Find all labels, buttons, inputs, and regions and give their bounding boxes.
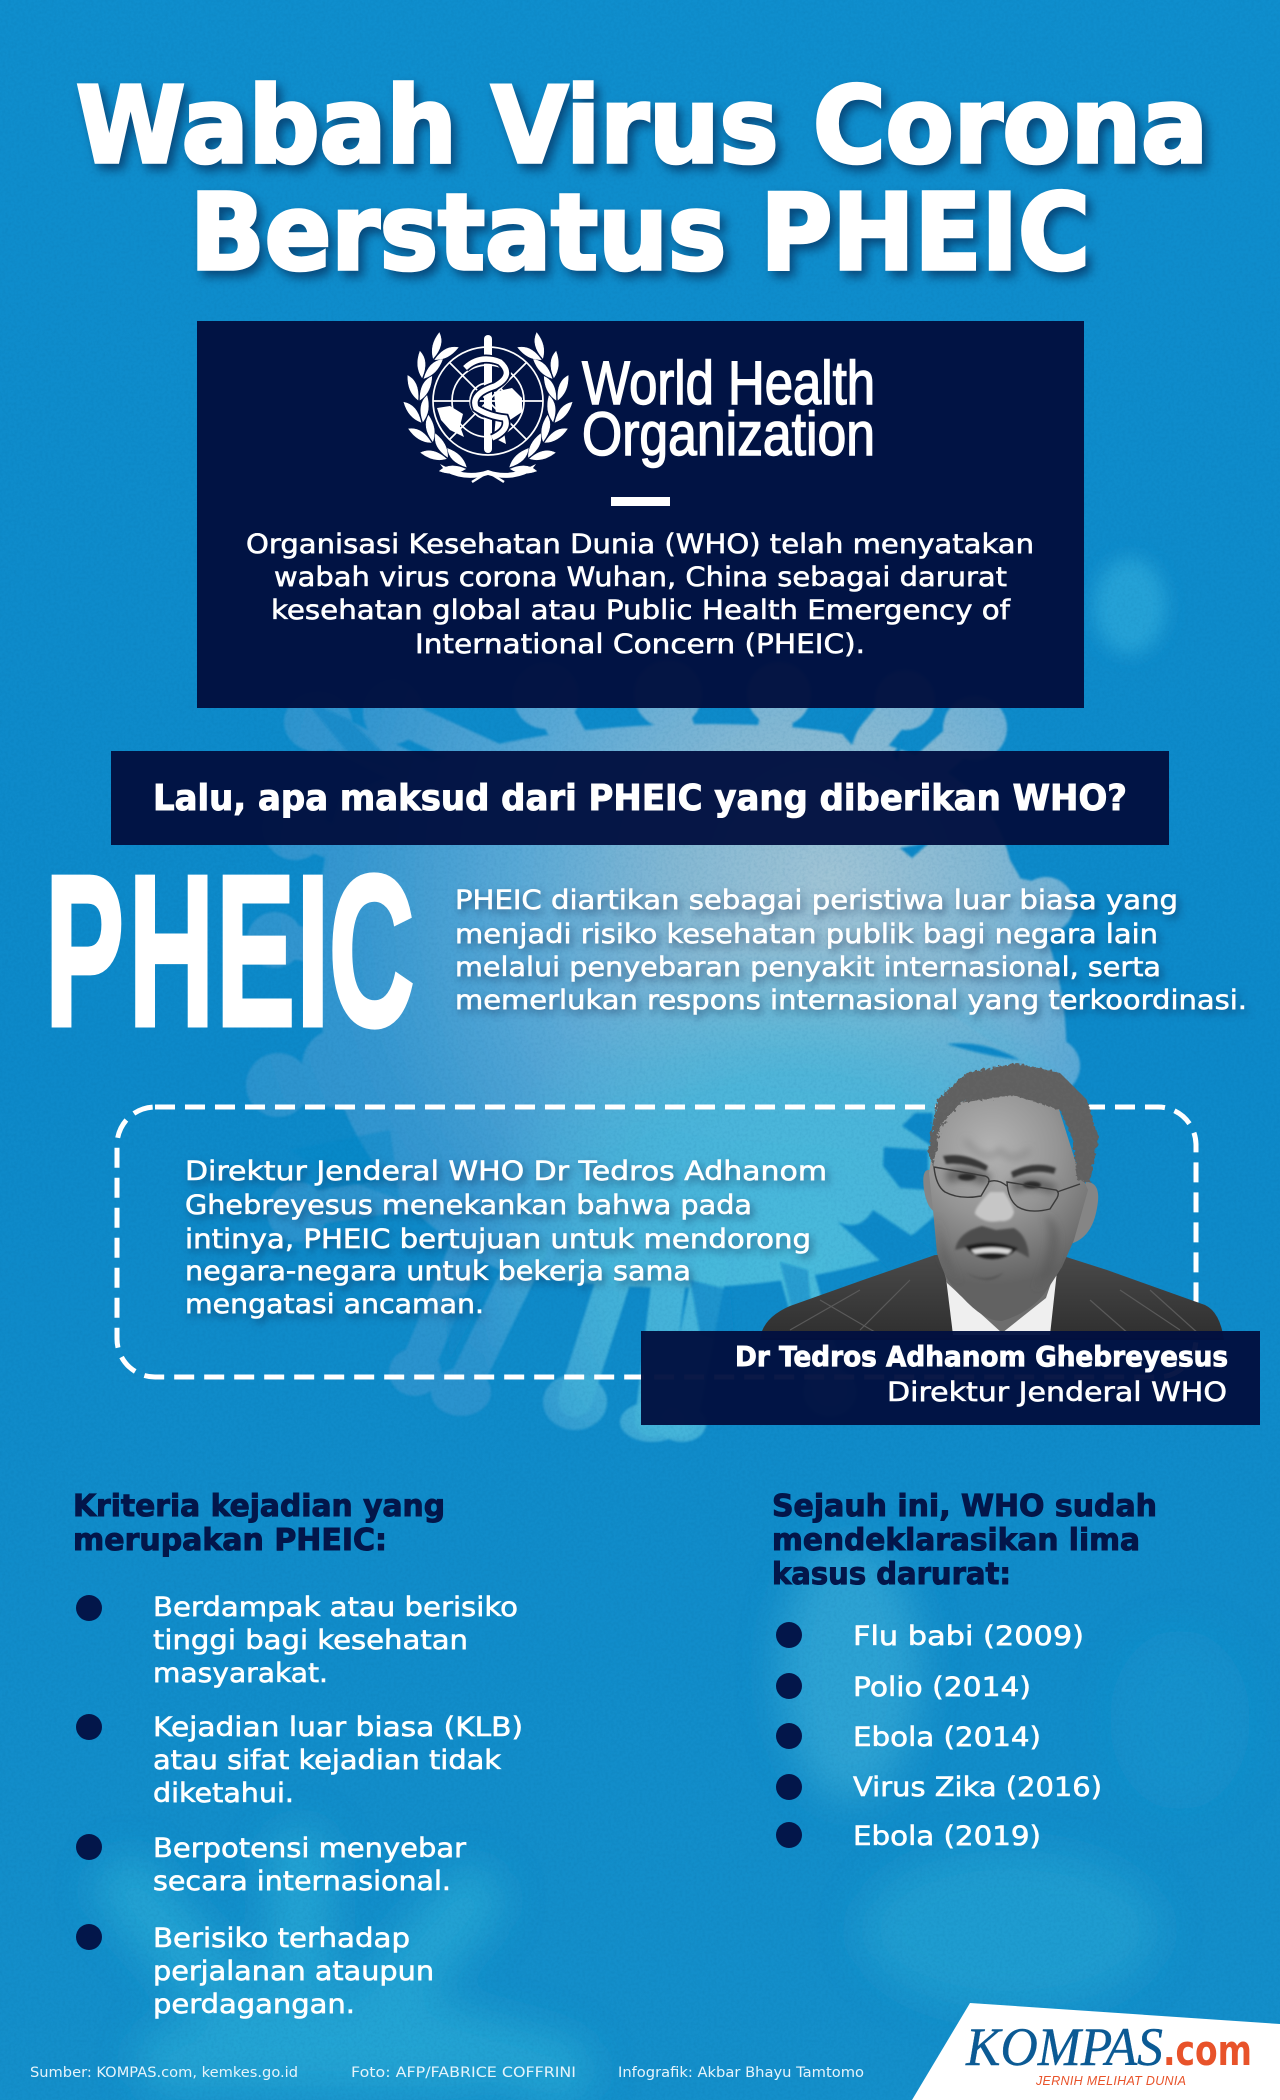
list: emergencies: Ebola (2014) xyxy=(853,1722,1041,1753)
list: criteria: Berisiko terhadap xyxy=(153,1923,410,1954)
list: criteria: secara internasional. xyxy=(153,1866,451,1897)
list: criteria: Berpotensi menyebar xyxy=(153,1833,467,1864)
big word: PHEIC: PHEIC xyxy=(45,830,414,1071)
text: WHO statement: Organisasi Kesehatan Dunia (WHO) telah menyatakan xyxy=(246,529,1034,560)
heading: criteria: Kriteria kejadian yang xyxy=(73,1489,445,1524)
title: Berstatus PHEIC xyxy=(190,172,1090,294)
title: Wabah Virus Corona xyxy=(76,65,1208,187)
text: WHO statement xyxy=(246,529,1034,660)
logo: KOMPAS.com xyxy=(912,2003,1280,2100)
heading: emergencies: mendeklarasikan lima xyxy=(772,1523,1140,1558)
text: World Health Organization: Organization xyxy=(582,400,875,468)
icon: WHO emblem xyxy=(404,333,572,482)
text: Tedros quote: negara-negara untuk bekerja sama xyxy=(185,1256,691,1287)
text: PHEIC definition: PHEIC diartikan sebagai peristiwa luar biasa yang xyxy=(455,885,1178,916)
list: emergencies xyxy=(853,1621,1102,1852)
background: blurred light spot, top right xyxy=(1094,558,1166,654)
text: Tedros quote xyxy=(185,1156,827,1320)
heading bar: question: Lalu, apa maksud dari PHEIC yang diberikan WHO? xyxy=(153,778,1127,819)
background: blurred light patches xyxy=(130,1540,1250,2070)
list: emergencies: Virus Zika (2016) xyxy=(853,1772,1102,1803)
text: Tedros quote: Direktur Jenderal WHO Dr Tedros Adhanom xyxy=(185,1156,827,1187)
background: gaps between virus spikes xyxy=(290,700,1020,1360)
heading: emergencies: Sejauh ini, WHO sudah xyxy=(772,1489,1157,1524)
list: emergencies: Polio (2014) xyxy=(853,1672,1031,1703)
list: criteria: atau sifat kejadian tidak xyxy=(153,1745,501,1776)
text: WHO statement: wabah virus corona Wuhan, China sebagai darurat xyxy=(274,562,1007,593)
bullets: criteria xyxy=(76,1595,102,1950)
list: criteria: masyarakat. xyxy=(153,1658,328,1689)
caption box: Dr Tedros xyxy=(641,1331,1260,1425)
heading: criteria: merupakan PHEIC: xyxy=(73,1523,387,1558)
logo: KOMPAS.com: KOMPAS xyxy=(965,2017,1163,2077)
logo: KOMPAS.com: .com xyxy=(1163,2026,1252,2075)
caption box: Dr Tedros: Direktur Jenderal WHO xyxy=(887,1377,1227,1408)
footer credits: Sumber: KOMPAS.com, kemkes.go.id xyxy=(30,2065,298,2081)
logo: KOMPAS.com: JERNIH MELIHAT DUNIA xyxy=(1035,2074,1186,2088)
heading bar: question xyxy=(111,751,1169,845)
list: criteria: Kejadian luar biasa (KLB) xyxy=(153,1712,523,1743)
list: emergencies: Ebola (2019) xyxy=(853,1821,1041,1852)
heading: emergencies xyxy=(772,1489,1157,1592)
heading: criteria xyxy=(73,1489,445,1558)
text: Tedros quote: intinya, PHEIC bertujuan untuk mendorong xyxy=(185,1224,811,1255)
text: WHO statement: International Concern (PHEIC). xyxy=(415,629,865,660)
text: Tedros quote: mengatasi ancaman. xyxy=(185,1289,484,1320)
list: criteria: perjalanan ataupun xyxy=(153,1956,434,1987)
text: PHEIC definition: melalui penyebaran penyakit internasional, serta xyxy=(455,952,1161,983)
list: criteria xyxy=(153,1592,523,2020)
panel: WHO statement xyxy=(197,321,1084,708)
list: criteria: diketahui. xyxy=(153,1778,294,1809)
column: PHEIC criteria xyxy=(73,1489,523,2020)
text: WHO statement: kesehatan global atau Public Health Emergency of xyxy=(271,595,1012,626)
list: criteria: perdagangan. xyxy=(153,1989,355,2020)
list: criteria: tinggi bagi kesehatan xyxy=(153,1625,468,1656)
column: declared emergencies xyxy=(772,1489,1157,1852)
background: virus illustration xyxy=(246,660,1080,1442)
footer credits: Foto: AFP/FABRICE COFFRINI xyxy=(351,2065,576,2081)
dashed quote frame xyxy=(117,1107,1196,1377)
heading: emergencies: kasus darurat: xyxy=(772,1557,1011,1592)
text: World Health Organization: World Health xyxy=(582,349,875,417)
list: criteria: Berdampak atau berisiko xyxy=(153,1592,518,1623)
portrait: Dr Tedros xyxy=(760,1063,1224,1340)
list: emergencies: Flu babi (2009) xyxy=(853,1621,1084,1652)
bullets: emergencies xyxy=(776,1622,802,1848)
text: Tedros quote: Ghebreyesus menekankan bahwa pada xyxy=(185,1190,752,1221)
caption box: Dr Tedros: Dr Tedros Adhanom Ghebreyesus xyxy=(735,1340,1228,1373)
text: PHEIC definition: menjadi risiko kesehatan publik bagi negara lain xyxy=(455,919,1158,950)
footer credits xyxy=(30,2065,864,2081)
text: PHEIC definition: memerlukan respons internasional yang terkoordinasi. xyxy=(455,985,1247,1016)
footer credits: Infografik: Akbar Bhayu Tamtomo xyxy=(618,2065,864,2081)
title xyxy=(76,65,1208,294)
text: World Health Organization xyxy=(582,349,875,468)
text: PHEIC definition xyxy=(455,885,1247,1016)
